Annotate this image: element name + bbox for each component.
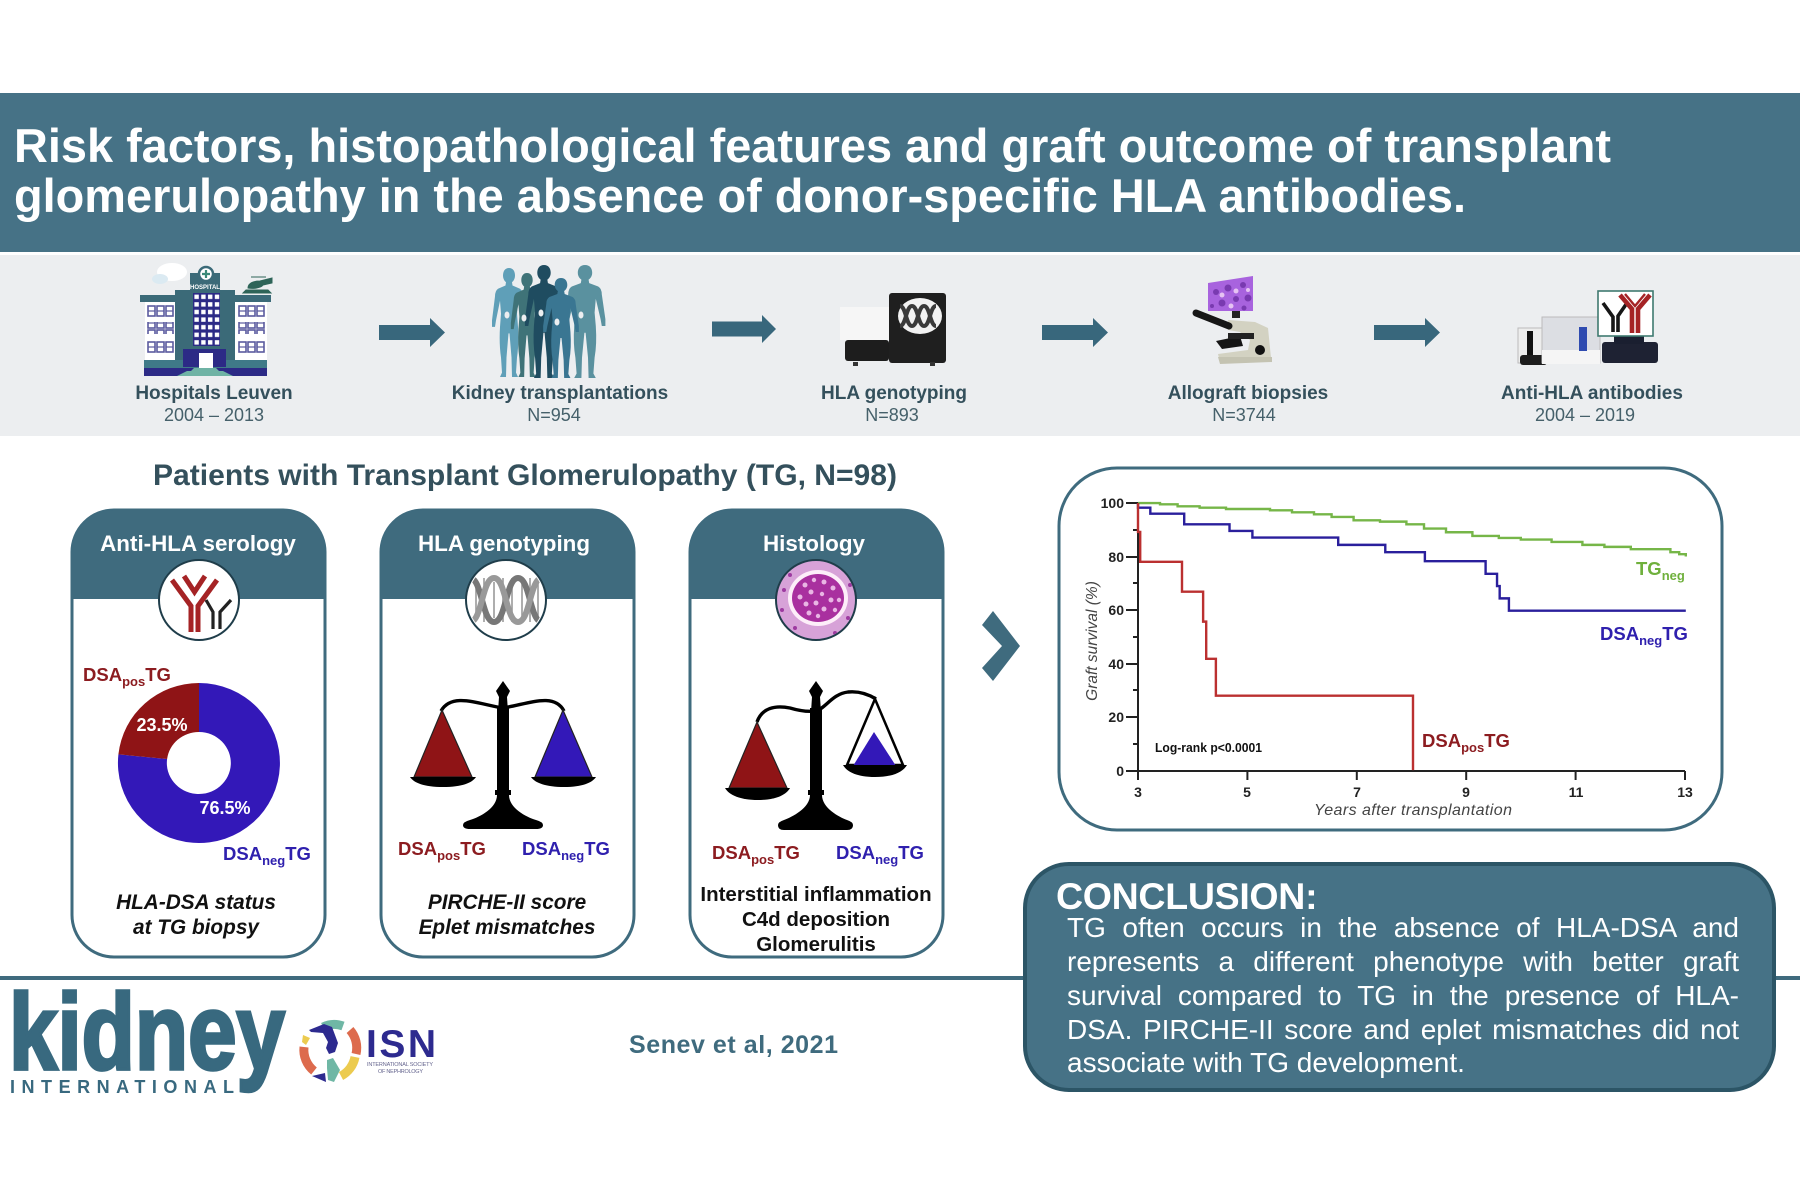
icon: sequencer (840, 293, 946, 366)
label: DSAneg: neg (561, 848, 584, 863)
step label: HLA genotyping: N=893 (865, 405, 919, 425)
chevron arrow (982, 611, 1020, 681)
logo: ISN (302, 1023, 436, 1082)
step label: anti-HLA antibodies: Anti-HLA antibodies (1501, 383, 1683, 404)
label: DSAneg: neg (875, 852, 898, 867)
line: DSApos (1138, 503, 1413, 770)
label: DSAneg: DSA (522, 838, 561, 859)
arrow 3 (1042, 318, 1108, 347)
label: DSAneg: TG (1662, 623, 1688, 644)
conclusion box (1023, 862, 1776, 1092)
caption: Glomerulitis (756, 933, 876, 956)
section heading: Patients with Transplant Glomerulopathy (TG, N=98) (153, 459, 897, 492)
logo: ISN: INTERNATIONAL SOCIETY (367, 1062, 433, 1068)
axis tick labels: 13 (1677, 784, 1693, 800)
axis tick labels: 80 (1108, 549, 1124, 565)
icon: hospital: HOSPITAL (190, 285, 220, 291)
logo: kidney international: INTERNATIONAL (10, 1077, 234, 1097)
donut chart: 23.5% (136, 715, 188, 735)
axis tick labels: 5 (1243, 784, 1251, 800)
line: DSAneg (1138, 503, 1686, 611)
label: DSApos: pos (1461, 740, 1484, 755)
donut chart (118, 683, 280, 843)
label: DSApos: TG (460, 838, 486, 859)
step label: anti-HLA antibodies (1501, 383, 1683, 425)
label: TGneg: TG (1636, 558, 1662, 579)
title banner (0, 93, 1800, 252)
caption (116, 891, 276, 939)
icon: hospital (140, 263, 272, 376)
icon: antibody analyzers (1518, 291, 1658, 365)
label: DSApos: DSA (1422, 730, 1461, 751)
icon: antibody circle (159, 560, 239, 640)
step label: hospitals: 2004 – 2013 (164, 405, 264, 425)
label: DSAneg: neg (262, 853, 285, 868)
step label: kidney transplantations (452, 383, 668, 425)
conclusion box: survival compared to TG in the presence of HLA- (1067, 980, 1739, 1011)
label: DSAneg: DSA (836, 842, 875, 863)
panel: anti-HLA serology: Anti-HLA serology (100, 531, 296, 556)
panel: histology: Histology (763, 531, 866, 556)
axis tick labels: 100 (1101, 495, 1124, 511)
title banner: Risk factors, histopathological features and graft outcome of transplant (14, 119, 1611, 172)
conclusion box: associate with TG development. (1067, 1047, 1465, 1078)
conclusion box: TG often occurs in the absence of HLA-DSA and (1067, 912, 1739, 943)
citation: Senev et al, 2021 (629, 1031, 838, 1059)
caption: PIRCHE-II score (428, 891, 586, 914)
icon: microscope with screen (1196, 276, 1272, 364)
axis tick labels: 9 (1462, 784, 1470, 800)
caption: at TG biopsy (133, 916, 260, 939)
icon: histology circle (776, 560, 856, 640)
axes (1126, 503, 1685, 780)
step label: anti-HLA antibodies: 2004 – 2019 (1535, 405, 1635, 425)
step label: hospitals (135, 383, 293, 425)
panel: HLA genotyping: HLA genotyping (418, 531, 590, 556)
axis tick labels: 40 (1108, 656, 1124, 672)
label: DSAneg: DSA (223, 843, 262, 864)
label: TGneg: neg (1662, 568, 1685, 583)
caption (419, 891, 595, 939)
caption: Interstitial inflammation (700, 883, 932, 906)
label: DSApos: TG (774, 842, 800, 863)
log-rank note: Log-rank p<0.0001 (1155, 740, 1262, 755)
icon: DNA circle (466, 560, 546, 640)
conclusion box: CONCLUSION: (1056, 875, 1317, 917)
panel: HLA genotyping (381, 510, 634, 957)
axis tick labels: 11 (1569, 784, 1584, 800)
logo: ISN: ISN (366, 1023, 436, 1066)
caption: HLA-DSA status (116, 891, 276, 914)
label: DSApos: DSA (83, 664, 122, 685)
donut chart: 76.5% (199, 798, 251, 818)
label: DSApos: TG (1484, 730, 1510, 751)
axis tick labels (1101, 495, 1693, 800)
arrow 2 (712, 315, 776, 343)
logo: ISN: OF NEPHROLOGY (378, 1069, 423, 1075)
panel: histology (690, 510, 943, 957)
icon: group of people (492, 265, 605, 378)
step label: kidney transplantations: Kidney transplantations (452, 383, 668, 404)
axis tick labels: 3 (1134, 784, 1142, 800)
balance scale: equal (410, 681, 596, 829)
axis tick labels: 60 (1108, 602, 1124, 618)
label: DSApos: DSA (398, 838, 437, 859)
balance scale: tilted (725, 681, 907, 830)
arrow 4 (1374, 318, 1440, 347)
caption (700, 883, 932, 956)
caption: C4d deposition (742, 908, 890, 931)
x axis title: Years after transplantation (1314, 802, 1512, 819)
y axis title: Graft survival (%) (1084, 581, 1101, 701)
panel: anti-HLA serology (72, 510, 325, 957)
step label: allograft biopsies: Allograft biopsies (1168, 383, 1328, 404)
axis tick labels: 20 (1108, 709, 1124, 725)
step label: kidney transplantations: N=954 (527, 405, 581, 425)
step label: HLA genotyping: HLA genotyping (821, 383, 967, 404)
label: DSAneg: TG (584, 838, 610, 859)
label: DSApos: TG (145, 664, 171, 685)
step label: HLA genotyping (821, 383, 967, 425)
label: DSAneg: DSA (1600, 623, 1639, 644)
label: DSApos: DSA (712, 842, 751, 863)
label: DSApos: pos (437, 848, 460, 863)
arrow 1 (379, 318, 445, 347)
axis tick labels: 0 (1116, 763, 1124, 779)
conclusion box: DSA. PIRCHE-II score and eplet mismatches did not (1067, 1014, 1739, 1045)
step label: hospitals: Hospitals Leuven (135, 383, 293, 404)
conclusion box: represents a different phenotype with better graft (1067, 946, 1739, 977)
title banner: glomerulopathy in the absence of donor-specific HLA antibodies. (14, 169, 1466, 222)
logo: kidney international: kidney (9, 971, 285, 1092)
workflow band (0, 255, 1800, 436)
footer rule (0, 976, 1800, 980)
label: DSAneg: TG (898, 842, 924, 863)
panel: survival chart (1059, 468, 1722, 830)
label: DSAneg: TG (285, 843, 311, 864)
axis tick labels: 7 (1353, 784, 1361, 800)
label: DSApos: pos (751, 852, 774, 867)
label: DSAneg: neg (1639, 633, 1662, 648)
step label: allograft biopsies: N=3744 (1212, 405, 1276, 425)
line: TGneg (1138, 503, 1686, 557)
label: DSApos: pos (122, 674, 145, 689)
caption: Eplet mismatches (419, 916, 595, 939)
step label: allograft biopsies (1168, 383, 1328, 425)
